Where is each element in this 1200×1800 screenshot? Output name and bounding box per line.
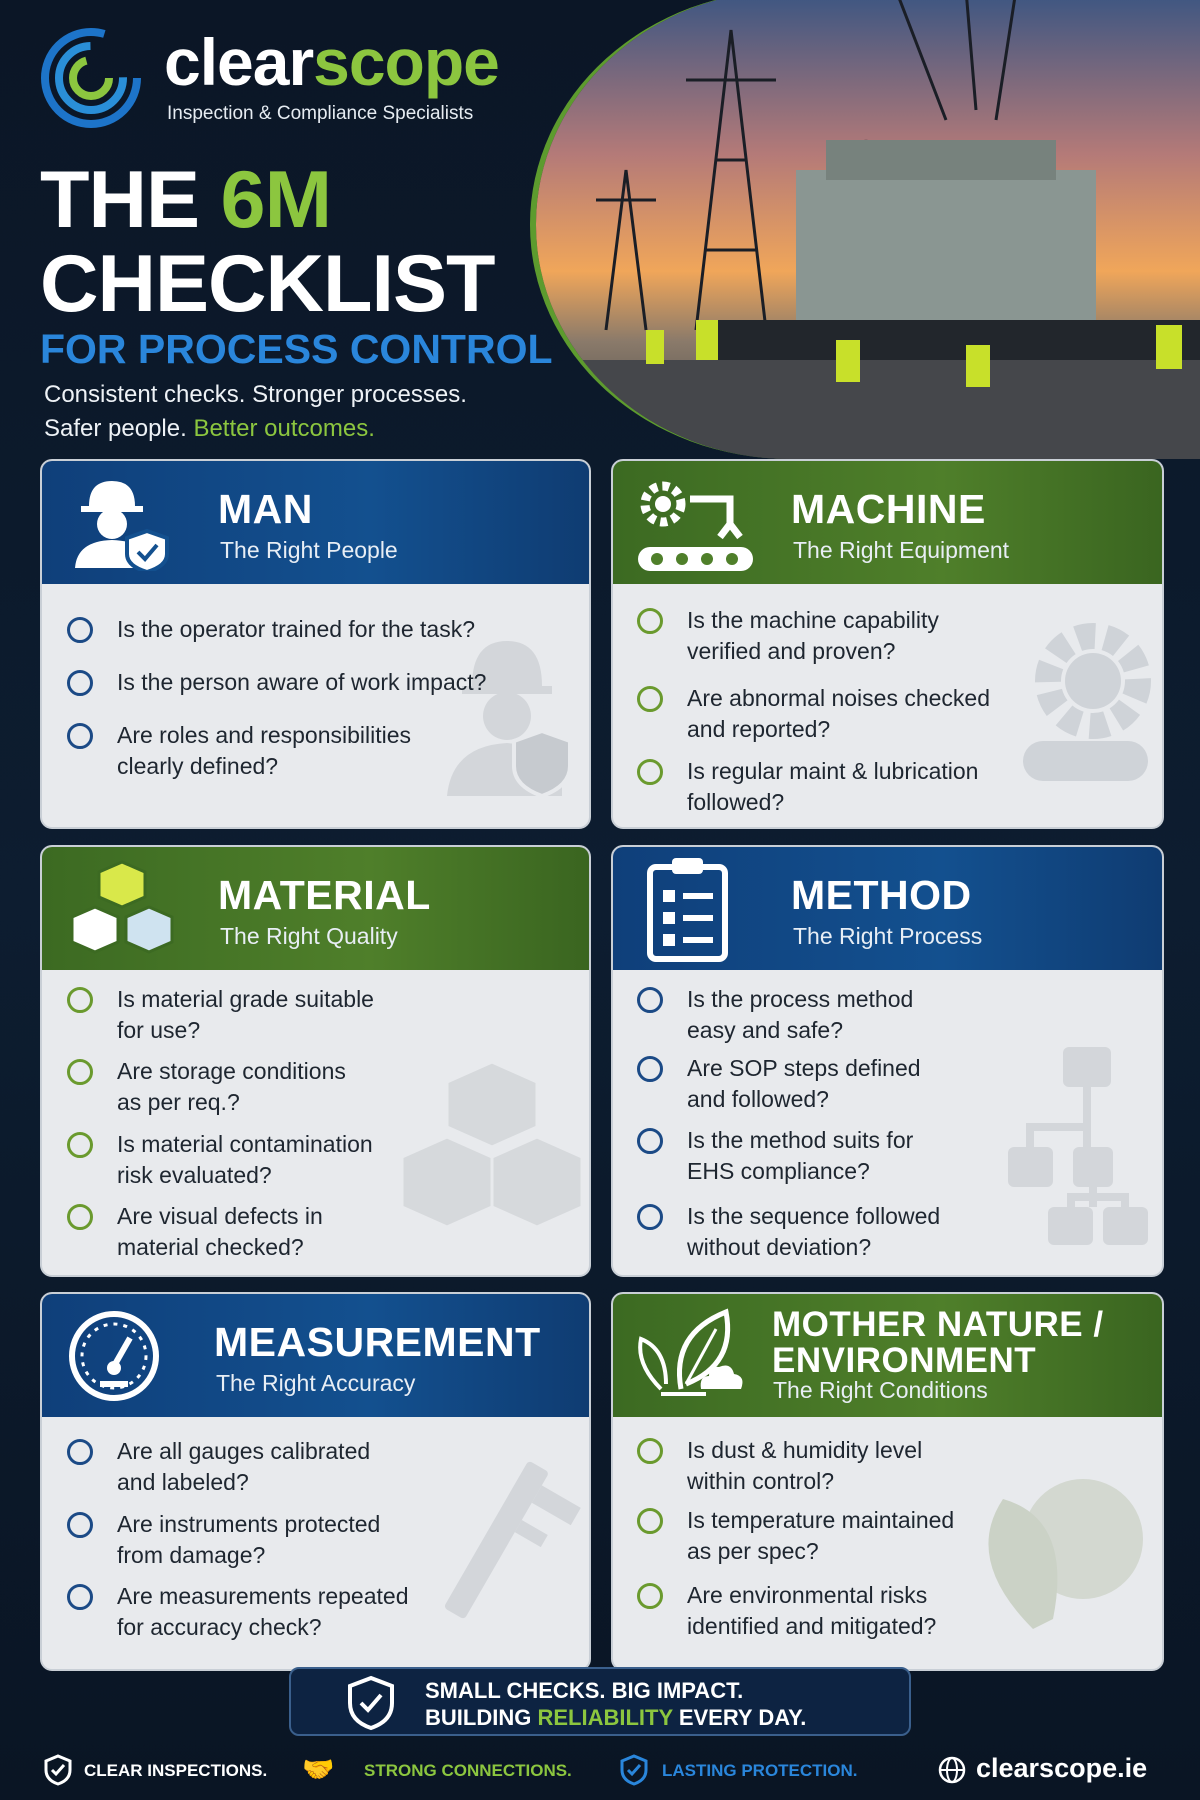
- icon: leaf and cloud: [638, 1308, 742, 1396]
- footer item: lasting protection: LASTING PROTECTION.: [662, 1761, 858, 1780]
- panel: mother nature: ENVIRONMENT: [772, 1341, 1036, 1380]
- banner: small checks: BUILDING RELIABILITY EVERY DAY.: [425, 1705, 806, 1730]
- icon: worker: [75, 481, 169, 571]
- panel: machine: and reported?: [687, 716, 830, 742]
- logo: [41, 25, 499, 128]
- panel: material: The Right Quality: [220, 923, 398, 949]
- panel: man: [40, 459, 591, 829]
- panel: material: as per req.?: [117, 1089, 240, 1115]
- footer item: strong connections: 🤝: [302, 1754, 334, 1784]
- footer item: strong connections: STRONG CONNECTIONS.: [364, 1761, 572, 1780]
- banner: small checks: SMALL CHECKS. BIG IMPACT.: [425, 1678, 743, 1703]
- panel: measurement: Are measurements repeated: [117, 1583, 408, 1609]
- footer: [44, 1753, 1147, 1786]
- panel: mother nature: The Right Conditions: [773, 1377, 988, 1403]
- title: CHECKLIST: [40, 239, 494, 329]
- panel: machine: followed?: [687, 789, 784, 815]
- panel: material: risk evaluated?: [117, 1162, 272, 1188]
- panel: machine: Is the machine capability: [687, 607, 939, 633]
- panel: machine: verified and proven?: [687, 638, 895, 664]
- panel: material: for use?: [117, 1017, 200, 1043]
- panel: machine: The Right Equipment: [793, 537, 1009, 563]
- footer item: website: clearscope.ie: [976, 1753, 1147, 1783]
- panel: machine: [611, 459, 1164, 829]
- panel: material: [40, 845, 591, 1277]
- panel: material: Is material grade suitable: [117, 986, 374, 1012]
- panel: measurement: [40, 1292, 591, 1671]
- panel: material: Is material contamination: [117, 1131, 373, 1157]
- panel: measurement: Are all gauges calibrated: [117, 1438, 370, 1464]
- hero photo: [530, 0, 1200, 459]
- panel: mother nature: Is temperature maintained: [687, 1507, 954, 1533]
- panel: method: without deviation?: [687, 1234, 871, 1260]
- panel: machine: Are abnormal noises checked: [687, 685, 990, 711]
- panel: method: The Right Process: [793, 923, 982, 949]
- panel: mother nature: [611, 1292, 1164, 1671]
- tagline: Consistent checks. Stronger processes.: [44, 381, 467, 408]
- panel: mother nature: within control?: [687, 1468, 834, 1494]
- panel: measurement: and labeled?: [117, 1469, 249, 1495]
- panel: mother nature: identified and mitigated?: [687, 1613, 936, 1639]
- panel: material: Are visual defects in: [117, 1203, 323, 1229]
- icon: shield check: [348, 1676, 394, 1730]
- icon: cubes: [74, 864, 174, 950]
- panel: method: Is the sequence followed: [687, 1203, 940, 1229]
- panel: machine: Is regular maint & lubrication: [687, 758, 978, 784]
- panel: material: material checked?: [117, 1234, 304, 1260]
- panel: mother nature: as per spec?: [687, 1538, 819, 1564]
- panel: method: easy and safe?: [687, 1017, 843, 1043]
- title: THE 6M: [40, 155, 331, 245]
- panel: machine: MACHINE: [791, 486, 986, 532]
- tagline: Safer people. Better outcomes.: [44, 415, 375, 442]
- title: FOR PROCESS CONTROL: [40, 326, 553, 372]
- logo: clearscope: [164, 25, 499, 99]
- panel: man: The Right People: [220, 537, 398, 563]
- banner: small checks: [289, 1667, 911, 1736]
- panel: measurement: MEASUREMENT: [214, 1319, 541, 1365]
- panel: method: Is the process method: [687, 986, 913, 1012]
- footer item: clear inspections: CLEAR INSPECTIONS.: [84, 1761, 267, 1780]
- icon: machine: [638, 482, 753, 571]
- footer item: strong connections: [302, 1754, 572, 1784]
- icon: clipboard: [647, 858, 728, 962]
- logo: Inspection & Compliance Specialists: [167, 103, 473, 124]
- panel: measurement: The Right Accuracy: [216, 1370, 415, 1396]
- tagline: [44, 381, 467, 442]
- panel: measurement: for accuracy check?: [117, 1614, 322, 1640]
- panel: mother nature: Is dust & humidity level: [687, 1437, 922, 1463]
- panel: method: Is the method suits for: [687, 1127, 913, 1153]
- watermark gear: [1023, 623, 1151, 781]
- title: [40, 155, 553, 372]
- footer item: lasting protection: [620, 1754, 858, 1786]
- panel: material: Are storage conditions: [117, 1058, 346, 1084]
- panel: measurement: from damage?: [117, 1542, 265, 1568]
- panel: method: and followed?: [687, 1086, 829, 1112]
- panel: measurement: Are instruments protected: [117, 1511, 380, 1537]
- panel: man: Are roles and responsibilities: [117, 722, 411, 748]
- icon: gauge: [69, 1311, 159, 1401]
- footer item: clear inspections: [44, 1754, 267, 1786]
- panel: man: Is the person aware of work impact?: [117, 669, 486, 695]
- panel: method: [611, 845, 1164, 1277]
- panel: method: Are SOP steps defined: [687, 1055, 921, 1081]
- panel: man: clearly defined?: [117, 753, 278, 779]
- panel: man: MAN: [218, 486, 313, 532]
- panel: mother nature: MOTHER NATURE /: [772, 1305, 1104, 1344]
- panel: man: Is the operator trained for the task?: [117, 616, 475, 642]
- panel: method: EHS compliance?: [687, 1158, 870, 1184]
- panel: mother nature: Are environmental risks: [687, 1582, 927, 1608]
- panel: method: METHOD: [791, 872, 972, 918]
- panel: material: MATERIAL: [218, 872, 431, 918]
